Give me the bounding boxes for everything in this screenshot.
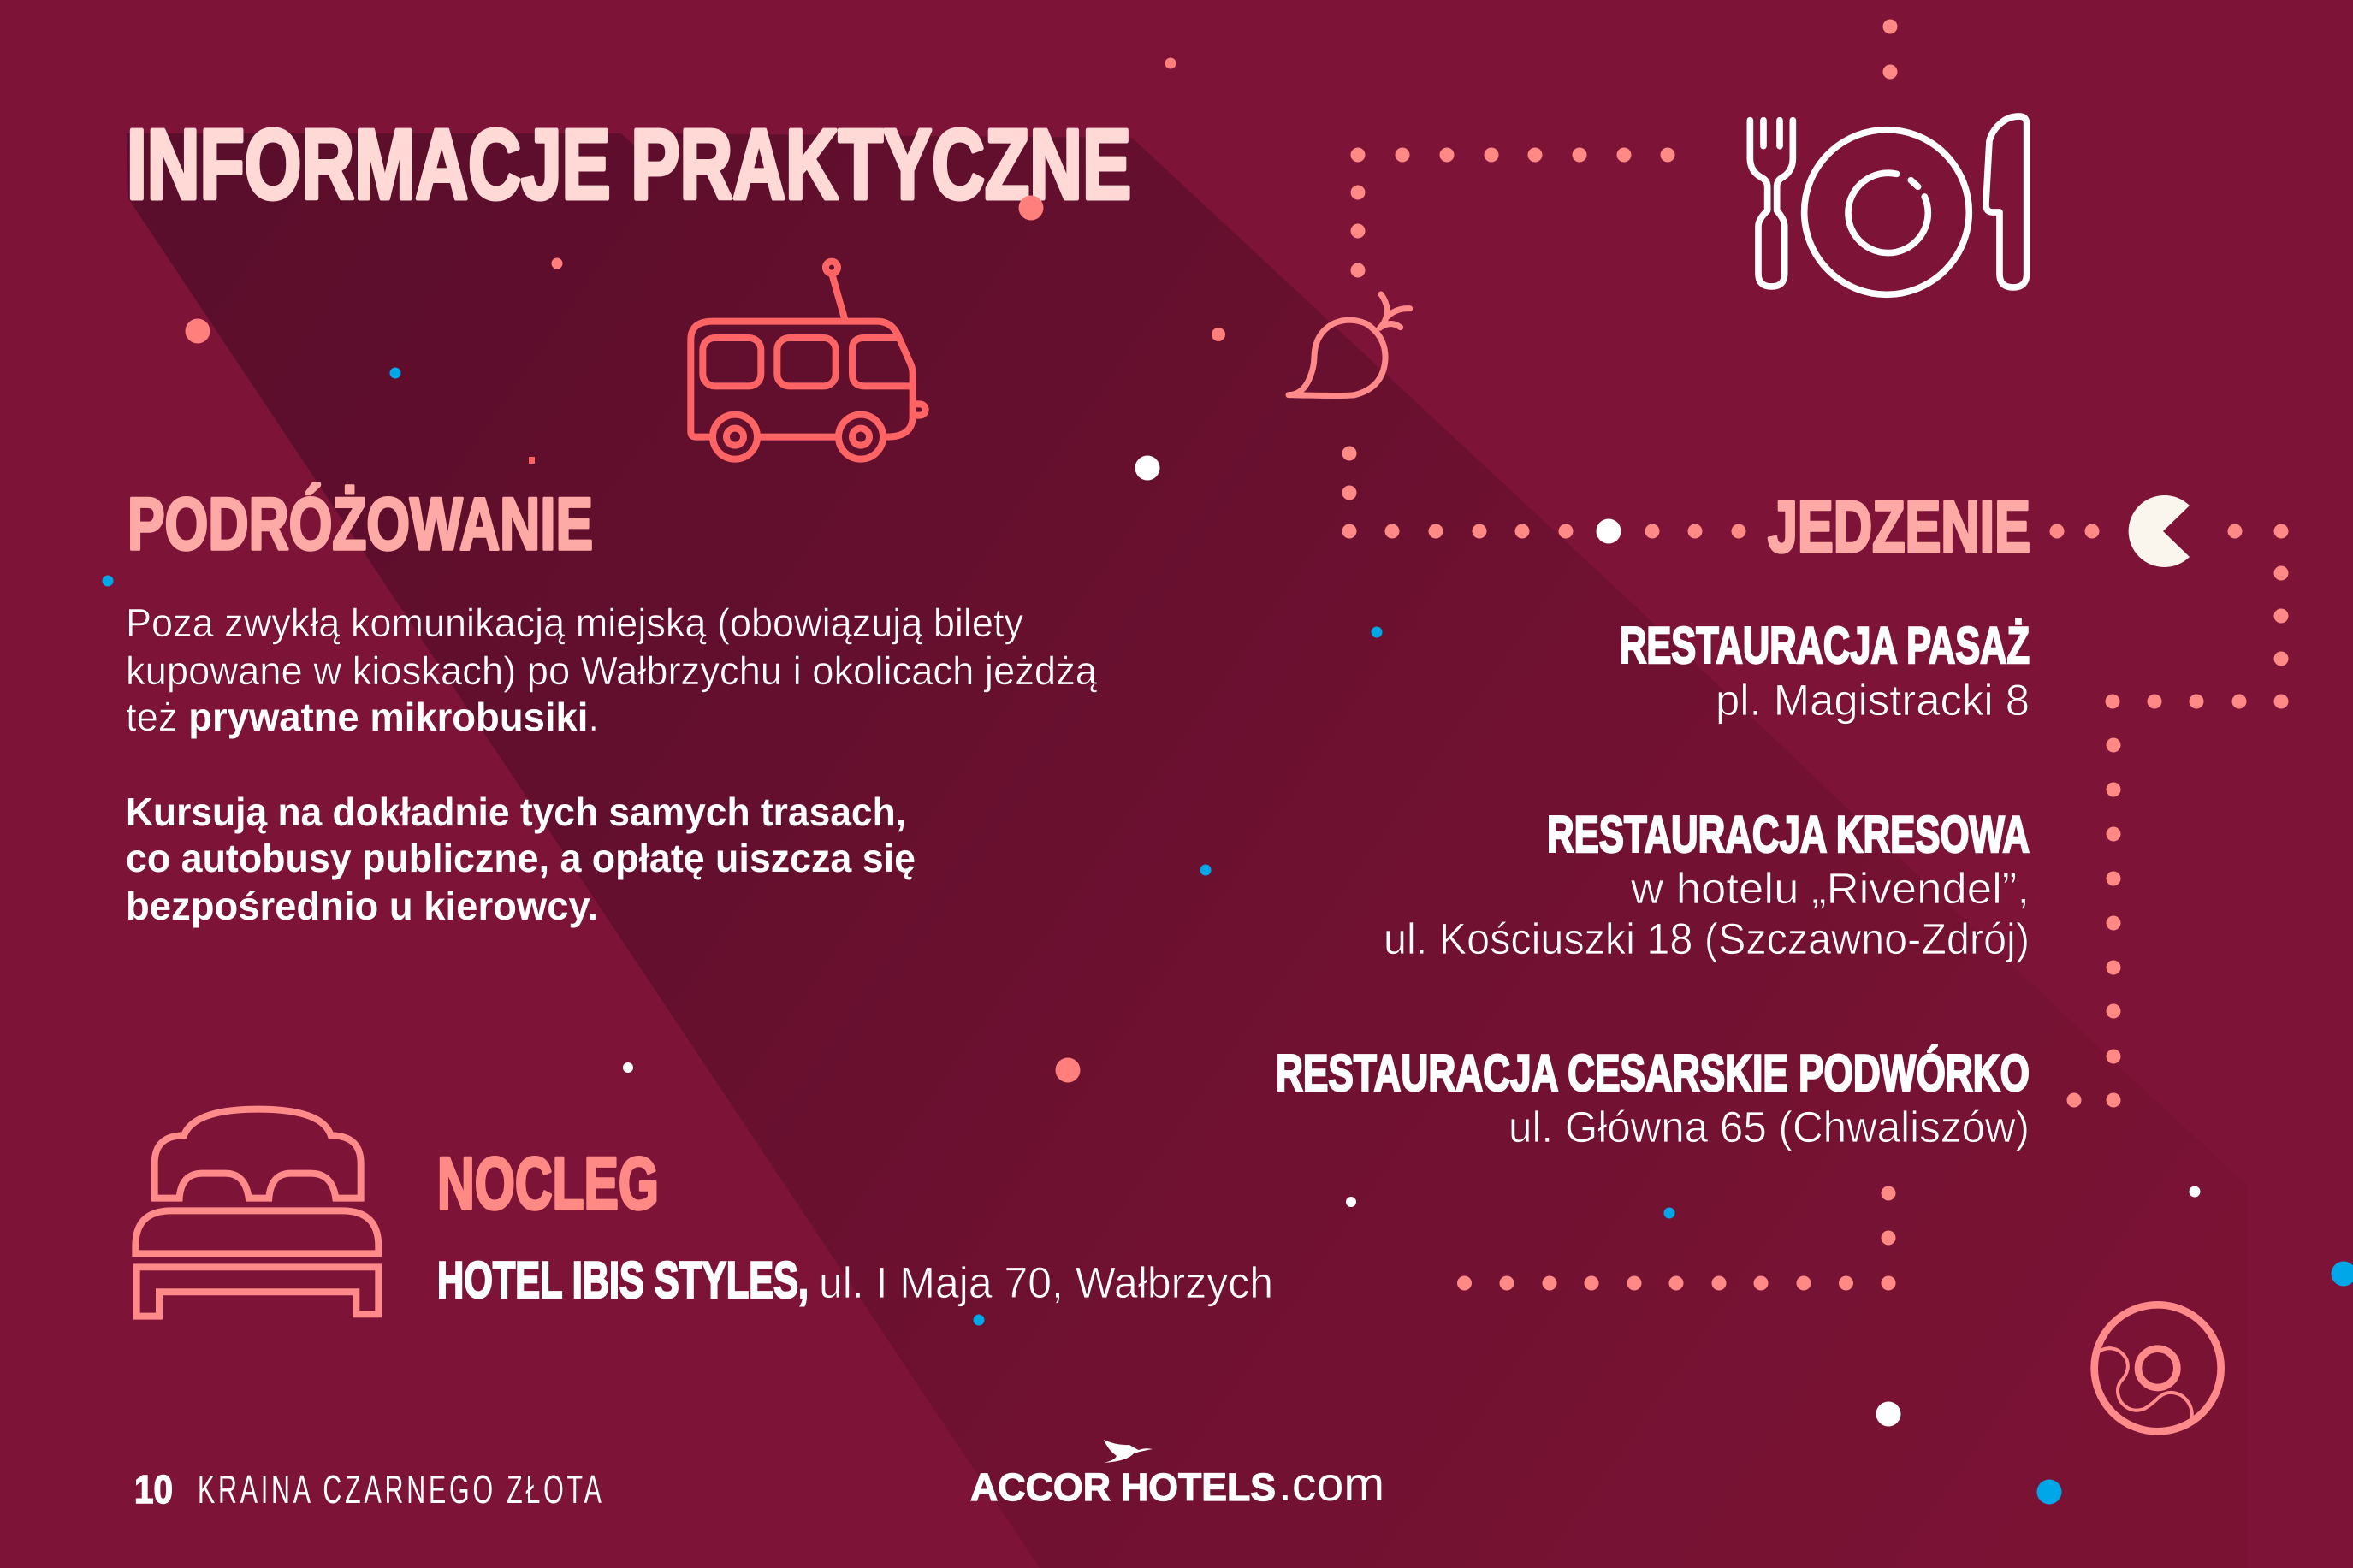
hotel info: HOTEL IBIS STYLES,	[437, 1251, 809, 1309]
restaurant: Cesarskie Podwórko: RESTAURACJA CESARSKIE PODWÓRKO	[1276, 1044, 2030, 1102]
icon: bus	[690, 262, 926, 459]
restaurant: Kresowa: w hotelu „Rivendel”,	[1630, 864, 2030, 913]
text block: travel intro: Poza zwykłą komunikacją miejską (obowiązują bilety	[126, 601, 1023, 645]
footer: page number and section name: KRAINA CZARNEGO ZŁOTA	[198, 1469, 602, 1512]
restaurant: Pasaż: pl. Magistracki 8	[1716, 676, 2030, 725]
pacman	[2129, 495, 2190, 567]
text block: travel bold note: co autobusy publiczne, a opłatę uiszcza się	[126, 836, 916, 880]
restaurant: Kresowa	[1384, 806, 2030, 963]
icon: beet	[1289, 294, 1410, 395]
text block: travel intro	[126, 601, 1097, 739]
restaurant: Cesarskie Podwórko	[1276, 1044, 2030, 1151]
restaurant: Pasaż: RESTAURACJA PASAŻ	[1620, 617, 2030, 674]
text block: travel bold note	[126, 790, 916, 928]
restaurant: Kresowa: RESTAURACJA KRESOWA	[1547, 806, 2030, 863]
text block: travel bold note: Kursują na dokładnie tych samych trasach,	[126, 790, 906, 834]
restaurant: Pasaż	[1620, 617, 2030, 725]
icon: circle emblem	[2095, 1305, 2221, 1431]
text block: travel intro: kupowane w kioskach) po Wałbrzychu i okolicach jeżdżą	[126, 648, 1097, 693]
logo: AccorHotels: .com	[1278, 1457, 1384, 1511]
hotel info	[437, 1251, 1273, 1309]
dotted path	[1342, 19, 2288, 1290]
text block: travel intro: też prywatne mikrobusiki.	[126, 695, 599, 739]
logo: AccorHotels	[970, 1440, 1384, 1511]
heading: accommodation: NOCLEG	[437, 1143, 659, 1225]
icon: plate and cutlery	[1750, 116, 2027, 294]
restaurant: Kresowa: ul. Kościuszki 18 (Szczawno-Zdrój)	[1384, 914, 2030, 963]
heading: travel: PODRÓŻOWANIE	[127, 483, 593, 565]
title: INFORMACJE PRAKTYCZNE	[127, 109, 1131, 220]
text block: travel bold note: bezpośrednio u kierowcy.	[126, 884, 598, 928]
hotel info: ul. I Maja 70, Wałbrzych	[819, 1258, 1273, 1307]
logo: AccorHotels: HOTELS	[1121, 1465, 1276, 1509]
footer: page number and section name: 10	[134, 1467, 173, 1512]
heading: food: JEDZENIE	[1768, 487, 2030, 568]
logo: AccorHotels: ACCOR	[970, 1465, 1111, 1509]
icon: bed	[135, 1109, 378, 1317]
restaurant: Cesarskie Podwórko: ul. Główna 65 (Chwaliszów)	[1508, 1103, 2030, 1151]
